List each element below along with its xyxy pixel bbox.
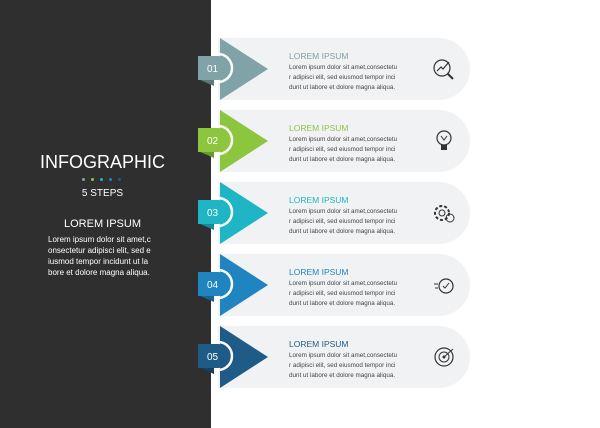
text block xyxy=(48,235,151,277)
text block: onsectetur adipisci elit, sed e xyxy=(48,246,151,255)
step 01: LOREM IPSUM xyxy=(289,51,349,61)
panel: dark sidebar xyxy=(0,0,211,428)
icon: target xyxy=(434,347,454,367)
text block: iusmod tempor incidunt ut la xyxy=(48,257,148,266)
step 05: dunt ut labore et dolore magna aliqua. xyxy=(289,372,395,379)
text block: bore et dolore magna aliqua. xyxy=(48,268,150,277)
step 01: dunt ut labore et dolore magna aliqua. xyxy=(289,84,395,91)
step 05: LOREM IPSUM xyxy=(289,339,349,349)
step 01: 01 xyxy=(207,64,219,75)
step 02: dunt ut labore et dolore magna aliqua. xyxy=(289,156,395,163)
step 04: r adipisci elit, sed eiusmod tempor inci xyxy=(289,290,395,297)
icon: bulb xyxy=(436,130,452,150)
step 05: Lorem ipsum dolor sit amet,consectetu xyxy=(289,352,397,359)
step 01: r adipisci elit, sed eiusmod tempor inci xyxy=(289,74,395,81)
dots xyxy=(82,178,121,181)
icon: stopwatch xyxy=(434,278,454,294)
step 02: 02 xyxy=(207,136,219,147)
step 04: Lorem ipsum dolor sit amet,consectetu xyxy=(289,280,397,287)
step 02: LOREM IPSUM xyxy=(289,123,349,133)
step 03 xyxy=(198,182,470,244)
text block: Lorem ipsum dolor sit amet,c xyxy=(48,235,151,244)
step 04: 04 xyxy=(207,280,219,291)
step 05: r adipisci elit, sed eiusmod tempor inci xyxy=(289,362,395,369)
step 04: LOREM IPSUM xyxy=(289,267,349,277)
step 02: Lorem ipsum dolor sit amet,consectetu xyxy=(289,136,397,143)
step 03: 03 xyxy=(207,208,219,219)
icon: chart magnifier xyxy=(433,59,454,80)
step 03: LOREM IPSUM xyxy=(289,195,349,205)
step 02 xyxy=(198,110,470,172)
heading: LOREM IPSUM xyxy=(64,218,141,230)
icon: gears xyxy=(434,205,454,222)
step 05: 05 xyxy=(207,352,219,363)
step 02: r adipisci elit, sed eiusmod tempor inci xyxy=(289,146,395,153)
step 01: Lorem ipsum dolor sit amet,consectetu xyxy=(289,64,397,71)
step 05 xyxy=(198,326,470,388)
step 04 xyxy=(198,254,470,316)
step 03: Lorem ipsum dolor sit amet,consectetu xyxy=(289,208,397,215)
title: INFOGRAPHIC xyxy=(40,152,165,172)
step 03: r adipisci elit, sed eiusmod tempor inci xyxy=(289,218,395,225)
subtitle: 5 STEPS xyxy=(82,188,123,199)
step 04: dunt ut labore et dolore magna aliqua. xyxy=(289,300,395,307)
step 03: dunt ut labore et dolore magna aliqua. xyxy=(289,228,395,235)
step 01 xyxy=(198,38,470,100)
